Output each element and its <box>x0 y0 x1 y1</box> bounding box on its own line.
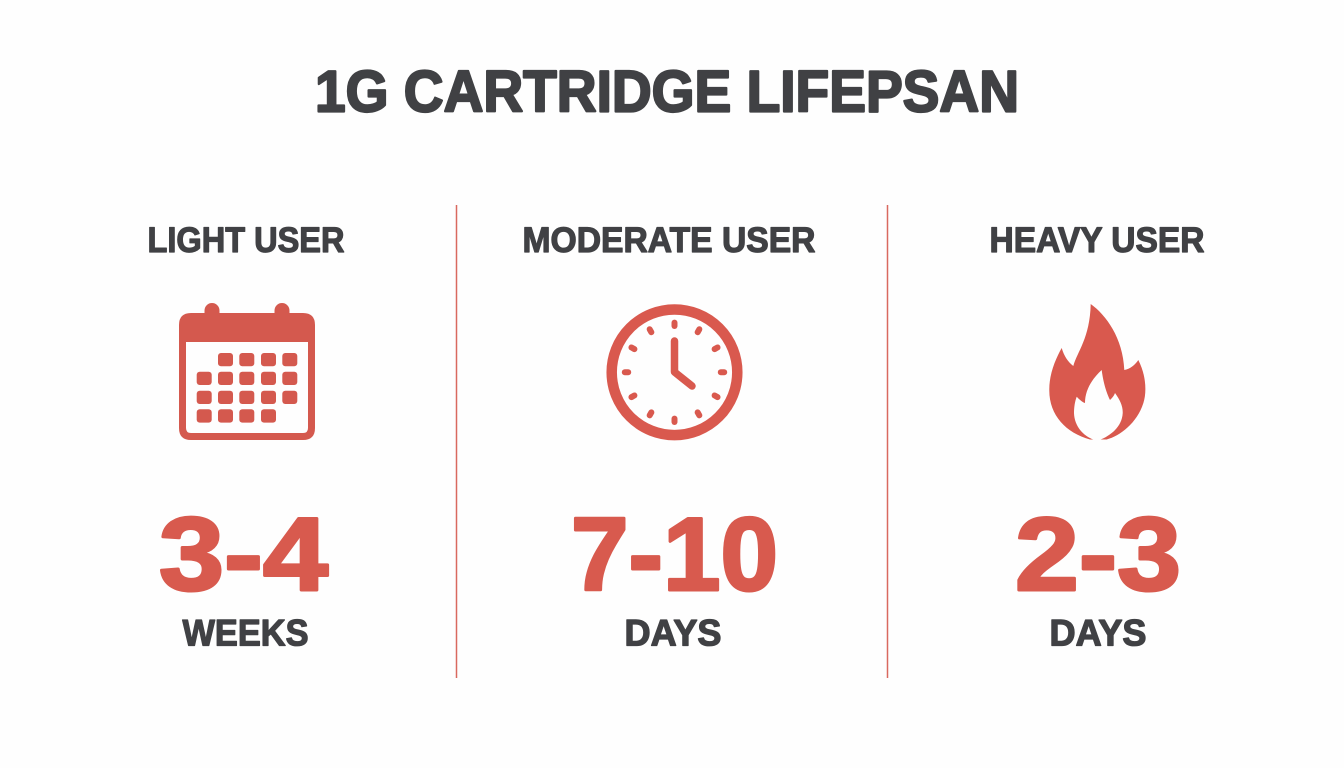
heading: light user: LIGHT USER <box>148 221 344 260</box>
panel: light user <box>148 221 344 654</box>
icon: calendar <box>179 303 315 440</box>
icon: flame <box>1049 304 1145 440</box>
heading: heavy user: HEAVY USER <box>990 221 1204 260</box>
panel: heavy user <box>990 221 1204 654</box>
panel: moderate user <box>522 221 816 654</box>
value: 7-10: 7-10 <box>571 497 778 613</box>
icon: clock <box>612 310 737 435</box>
unit: weeks: WEEKS <box>182 612 308 654</box>
value: 2-3: 2-3 <box>1015 497 1181 613</box>
value: 3-4: 3-4 <box>159 497 328 613</box>
unit: days: DAYS <box>1050 612 1146 654</box>
unit: days: DAYS <box>624 612 722 654</box>
title: 1G CARTRIDGE LIFEPSAN <box>315 60 1019 125</box>
heading: moderate user: MODERATE USER <box>522 221 816 260</box>
